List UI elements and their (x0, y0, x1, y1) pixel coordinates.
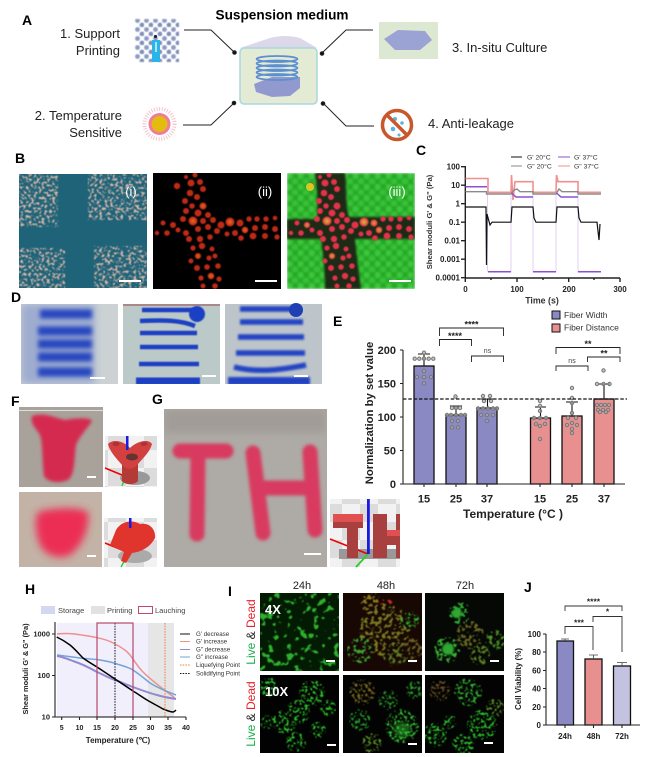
axis numbers: 1 (456, 200, 461, 208)
axes (543, 634, 640, 728)
icon: temperature sensitive particle (144, 109, 174, 139)
panel J: cell viability chart (514, 579, 640, 741)
significance marks: **** (448, 331, 462, 341)
image 4X 72h (425, 593, 504, 671)
time ticks (463, 285, 627, 294)
label E: E (333, 313, 342, 329)
significance marks: **** (464, 320, 479, 330)
legend: G" 37°C (574, 162, 599, 170)
x ticks: 30 (147, 725, 154, 732)
heading: suspension medium: Suspension medium (216, 8, 348, 22)
panel D: printed lattices (11, 289, 322, 384)
significance marks: *** (574, 618, 585, 628)
time ticks: 300 (613, 285, 627, 294)
image i: bright field: (i) (125, 184, 137, 199)
label B: B (15, 150, 25, 166)
side label row 2: Live & Dead (244, 681, 258, 747)
3D model: vessel (104, 436, 157, 487)
significance brackets (440, 328, 620, 371)
significance marks (448, 320, 608, 358)
significance marks (574, 596, 610, 628)
label A: A (22, 12, 32, 28)
y ticks: 150 (378, 378, 396, 390)
legend band: Printing (107, 606, 132, 615)
legend curves: Liquefying Point (196, 662, 240, 669)
legend: G' 20°C (527, 154, 551, 162)
axis numbers: 0.01 (444, 236, 461, 246)
curve: G'' decrease (57, 656, 176, 699)
image ii: red fluorescent channel (153, 173, 281, 289)
solidifying point line (114, 623, 116, 717)
significance marks: ** (600, 348, 608, 358)
series: G' 37 drop lines (488, 187, 578, 272)
significance marks: **** (587, 596, 601, 606)
text: temperature sensitive: 2. Temperature (35, 108, 122, 123)
x ticks: 37 (598, 494, 610, 506)
axis title: temperature: Temperature (°C ) (463, 507, 563, 521)
x ticks: 10 (76, 725, 83, 732)
image 4X 24h (260, 593, 339, 671)
side label row 1: Live & Dead (244, 599, 258, 665)
ns marks (484, 348, 576, 365)
time ticks: 0 (463, 285, 468, 294)
legend curves: G' increase (196, 638, 228, 646)
liquefying point line (164, 623, 166, 717)
connector 3 (320, 30, 373, 55)
time ticks: 100 (510, 285, 524, 294)
axis numbers: 10 (451, 181, 461, 190)
panel G: TH print (152, 391, 400, 567)
legend curves: Solidifying Point (196, 670, 240, 678)
photo: printed vessel (19, 407, 103, 487)
text: support printing: 1. Support (60, 26, 120, 41)
label J: J (524, 579, 532, 595)
axes (52, 622, 186, 720)
x ticks: 15 (418, 494, 430, 506)
photo 2 (123, 304, 220, 384)
x ticks (60, 725, 190, 732)
error bars (561, 639, 627, 666)
axis title: time: Time (s) (525, 296, 559, 306)
image 4X 24h: 4X (265, 602, 281, 617)
panel E: normalized fiber bar chart (333, 310, 627, 521)
storage region (57, 623, 148, 717)
legend: G" 20°C (527, 162, 552, 170)
legend: Fiber Width (564, 310, 608, 320)
ns marks: ns (568, 358, 576, 365)
connector 4 (321, 102, 374, 126)
y ticks: 200 (378, 345, 396, 357)
x ticks: 72h (615, 732, 629, 741)
image 10X 24h (260, 675, 339, 753)
connector 1 (184, 30, 236, 54)
legend (511, 154, 599, 170)
legend band: Storage (58, 606, 84, 615)
image ii: red fluorescent channel: (ii) (258, 184, 272, 199)
curve: G'' increase (57, 655, 176, 695)
label C: C (416, 142, 426, 158)
axis title: shear moduli: Shear moduli G' & G" (Pa) (21, 623, 30, 715)
axis title: temperature: Temperature (℃) (86, 736, 151, 745)
image i: bright field (19, 174, 147, 288)
time headers: 48h (377, 580, 395, 592)
axis numbers: 100 (447, 162, 461, 172)
panel I: live dead images (228, 580, 505, 756)
x ticks: 25 (129, 725, 137, 732)
y ticks (33, 630, 50, 722)
bars (414, 366, 614, 484)
series: G' 20 (466, 207, 600, 265)
y ticks: 50 (384, 446, 396, 458)
image 10X 72h (425, 675, 504, 753)
x ticks: 15 (534, 494, 546, 506)
panel H: temperature sweep chart (21, 581, 240, 745)
y ticks: 60 (532, 666, 542, 676)
significance brackets (565, 606, 622, 652)
x ticks: 5 (60, 725, 64, 732)
printing region (148, 623, 174, 717)
icon: container with printed coil (240, 36, 317, 104)
legend curves (180, 631, 240, 678)
image 4X 48h (343, 593, 422, 671)
icon: support printing nozzle in microgel (135, 19, 179, 62)
y ticks (378, 345, 396, 491)
axis numbers: 0.1 (449, 218, 461, 227)
label G: G (152, 391, 163, 407)
x ticks: 35 (164, 725, 172, 732)
image 10X 24h: 10X (265, 684, 288, 699)
x ticks: 20 (111, 725, 119, 732)
x ticks: 37 (481, 494, 493, 506)
3D model: heart (104, 518, 157, 568)
photo: printed letters TH (164, 409, 327, 567)
axes (461, 166, 620, 282)
error bars (418, 354, 610, 418)
time headers: 72h (456, 580, 474, 592)
legend band (41, 606, 185, 615)
text: in-situ culture: 3. In-situ Culture (452, 40, 547, 55)
legend curves: G' decrease (196, 631, 230, 638)
data points (413, 351, 611, 441)
axis title: shear moduli: Shear moduli G' & G" (Pa) (425, 174, 434, 269)
x ticks: 25 (566, 494, 578, 506)
reference dashed line (403, 398, 627, 400)
legend: Fiber Distance (564, 322, 619, 332)
y ticks: 10 (42, 712, 50, 722)
significance marks: ** (584, 339, 592, 349)
y ticks: 80 (532, 648, 542, 657)
y ticks: 100 (378, 412, 396, 424)
time headers: 24h (293, 580, 311, 592)
x ticks: 25 (450, 494, 462, 506)
bars (557, 641, 630, 725)
photo 3 (225, 303, 322, 384)
icon: in-situ culture (379, 22, 438, 59)
x ticks: 48h (587, 732, 600, 741)
legend (552, 310, 619, 332)
lauching window (97, 623, 133, 717)
time ticks: 200 (562, 285, 576, 294)
axis numbers (436, 162, 461, 282)
legend curves: G" increase (196, 654, 229, 661)
axis numbers: 0.001 (440, 255, 461, 264)
panel C: shear moduli time sweep chart (416, 142, 627, 306)
y ticks: 40 (532, 684, 542, 694)
axis numbers: 0.0001 (436, 274, 461, 282)
time headers (293, 580, 474, 592)
series: G'' 20 (466, 189, 601, 194)
y ticks: 0 (537, 721, 542, 730)
icon: no leakage (382, 110, 412, 140)
y ticks: 100 (528, 630, 542, 639)
y ticks: 100 (37, 671, 50, 680)
text: support printing: Printing (76, 43, 120, 58)
x ticks (418, 494, 610, 506)
y ticks: 0 (390, 479, 396, 491)
curve: G' decrease (57, 637, 176, 712)
axis title: normalization: Normalization by set value (364, 342, 376, 484)
3D model: TH (330, 499, 400, 568)
significance marks: * (606, 606, 610, 616)
photo 1 (21, 304, 118, 384)
x ticks: 40 (182, 725, 190, 732)
photo: printed heart (19, 492, 102, 567)
legend curves: G" decrease (196, 646, 231, 654)
label D: D (11, 289, 21, 305)
series: G'' 37 (466, 175, 601, 200)
y ticks: 20 (532, 703, 542, 712)
panel A: suspension medium schematic (22, 8, 547, 140)
axes (400, 350, 625, 487)
image 10X 48h (343, 675, 422, 753)
series: G' 37 (466, 187, 601, 272)
label H: H (25, 581, 35, 597)
y ticks (528, 630, 542, 730)
legend band: Lauching (155, 606, 185, 615)
y ticks: 1000 (33, 630, 50, 638)
label I: I (228, 583, 232, 599)
connector 2 (183, 101, 236, 125)
label F: F (11, 393, 20, 409)
curve: G' increase (57, 634, 175, 698)
x ticks (558, 732, 629, 741)
x ticks: 24h (558, 732, 572, 741)
image iii: merged fluorescent channels (287, 173, 415, 289)
legend: G' 37°C (574, 154, 598, 162)
x ticks: 15 (93, 725, 101, 732)
panel B: microscopy images (15, 150, 415, 289)
ns marks: ns (484, 348, 492, 355)
panel F: printed shapes (11, 393, 157, 567)
image iii: merged fluorescent channels: (iii) (388, 184, 406, 199)
text: temperature sensitive: Sensitive (69, 125, 122, 140)
axis title: Cell Viability (%) (514, 648, 523, 710)
text: anti-leakage: 4. Anti-leakage (428, 116, 514, 131)
